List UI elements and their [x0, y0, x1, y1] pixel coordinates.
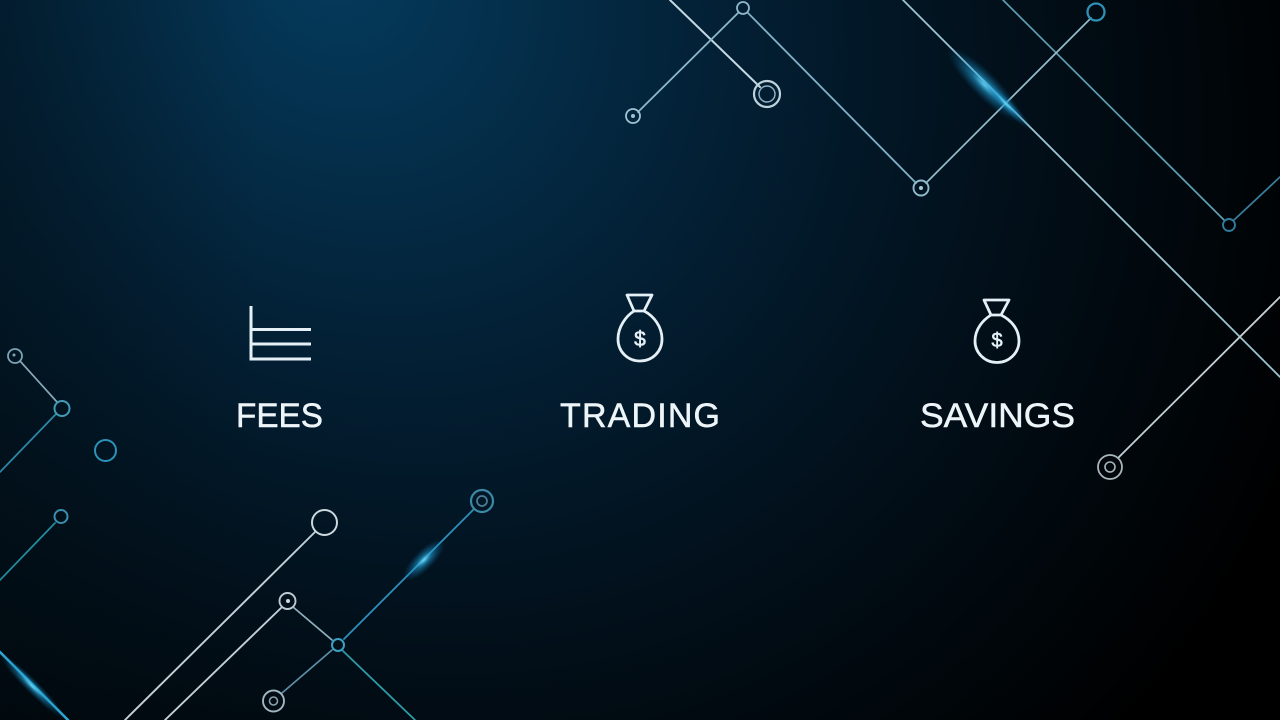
network lines: top right — [903, 0, 1280, 377]
node: junction ring — [54, 401, 70, 416]
icon: money bag — [618, 295, 662, 361]
icon: money bag — [975, 300, 1019, 362]
column: savings — [920, 300, 1075, 435]
icon: money bag: $ — [634, 328, 646, 351]
node: bottom ring with dot — [914, 180, 928, 196]
network lines: top centre — [626, 0, 916, 183]
node: top small ring — [737, 2, 749, 14]
node: right small ring — [1223, 219, 1235, 231]
glow on diagonal line — [939, 39, 1031, 131]
node: ring with dot — [8, 349, 22, 363]
node: lower ring — [54, 510, 68, 523]
column: trading — [560, 295, 720, 435]
node: large double ring — [754, 81, 780, 107]
glow on rising line — [397, 533, 451, 587]
label: savings: SAVINGS — [920, 397, 1075, 435]
node: top right ring — [1088, 4, 1104, 20]
node: double ring bottom — [263, 690, 284, 712]
node: left dotted ring — [626, 109, 640, 123]
node: junction ring — [332, 639, 344, 651]
network lines: bottom left — [0, 490, 493, 720]
icon: bar chart — [251, 306, 311, 359]
network line: lower right — [1098, 297, 1280, 479]
node: double ring top right — [471, 490, 493, 512]
icon: money bag: $ — [991, 330, 1003, 352]
column: fees — [236, 306, 323, 435]
glow at bottom-left corner — [0, 649, 69, 720]
network lines: left edge — [0, 349, 116, 580]
label: trading: TRADING — [560, 397, 720, 435]
node: small ring with dot — [280, 593, 296, 609]
node: free ring — [95, 440, 116, 461]
node: large ring — [312, 510, 337, 535]
label: fees: FEES — [236, 397, 323, 435]
